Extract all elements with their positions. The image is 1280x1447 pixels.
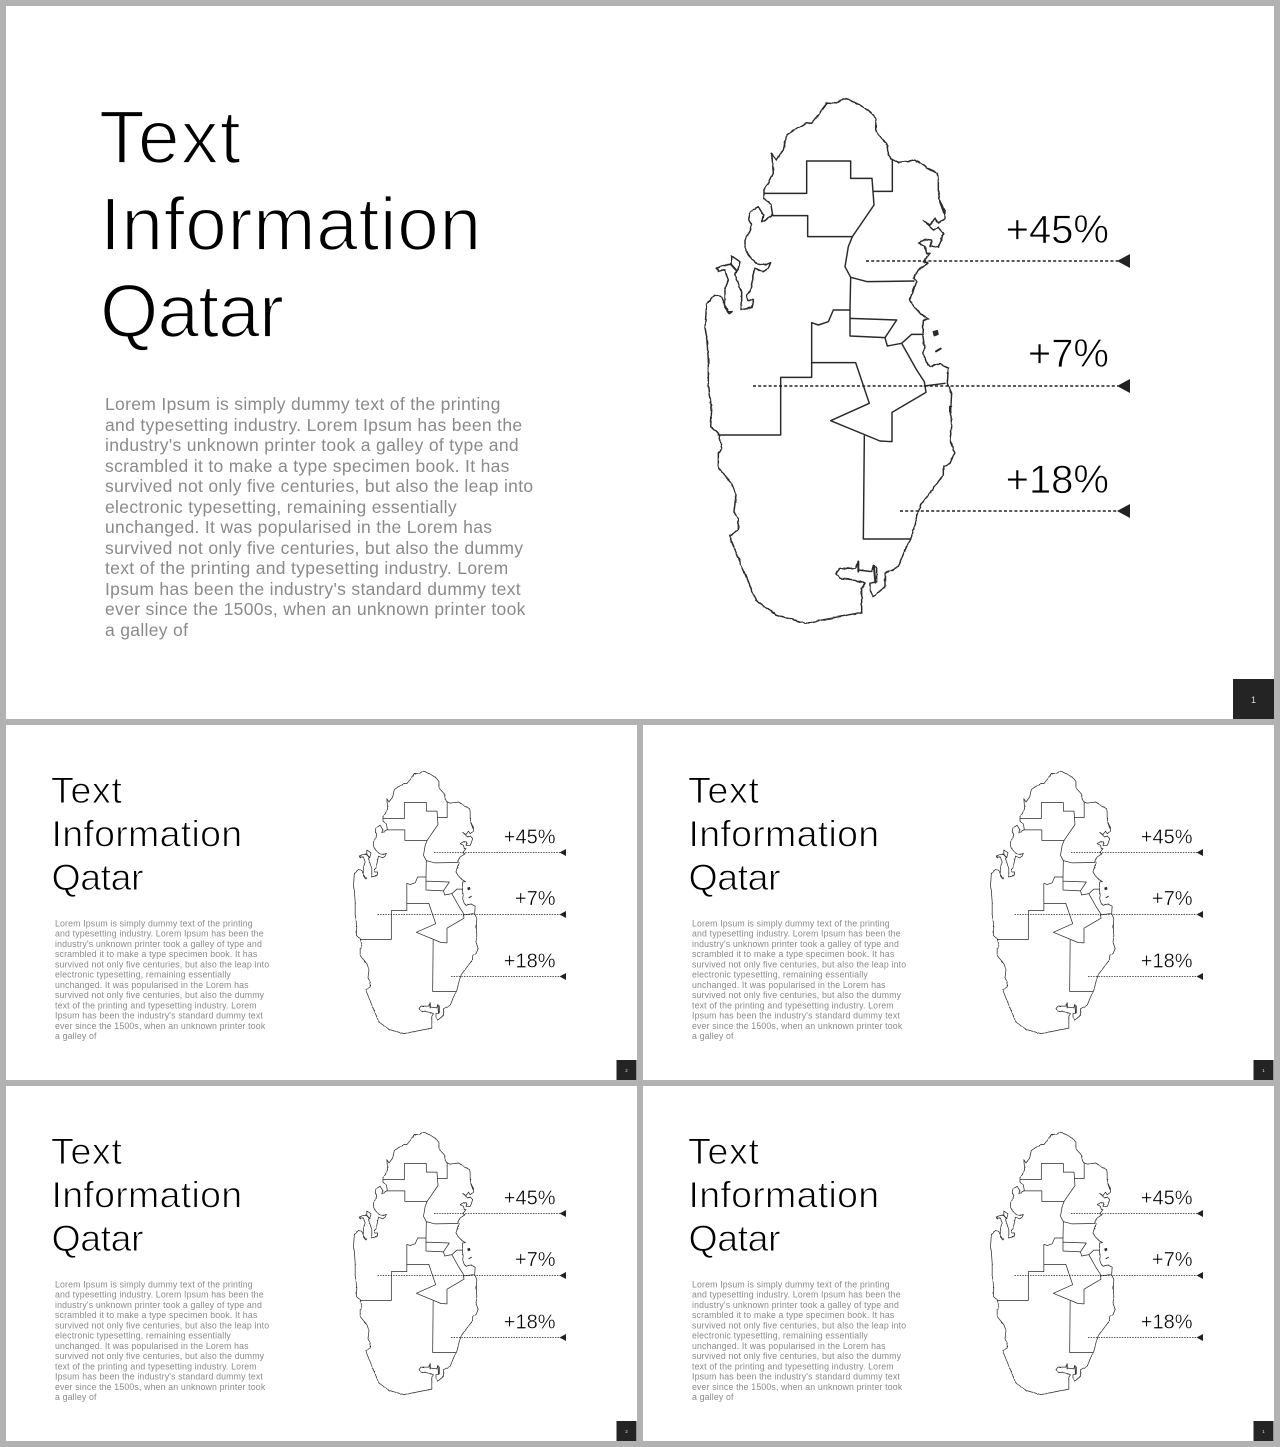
- body text: a galley of: [692, 1031, 734, 1041]
- leader arrow: +45%: [434, 849, 566, 856]
- leader arrow: +7%: [1014, 1272, 1203, 1279]
- panel: large slide 1 background: [6, 6, 1274, 719]
- body text: text of the printing and typesetting industry. Lorem: [692, 1000, 894, 1010]
- title: [688, 1130, 879, 1259]
- body text: text of the printing and typesetting industry. Lorem: [105, 558, 508, 578]
- label: +45%: +45%: [504, 1187, 556, 1209]
- body text: survived not only five centuries, but also the leap into: [105, 476, 533, 496]
- panel: small slide 3 background: [643, 725, 1274, 1080]
- body text: text of the printing and typesetting industry. Lorem: [692, 1361, 894, 1371]
- page number: 2: [625, 1429, 628, 1434]
- page number: [616, 1060, 636, 1080]
- body text: unchanged. It was popularised in the Lorem has: [55, 1341, 249, 1351]
- label: +18%: +18%: [504, 950, 556, 972]
- body text: and typesetting industry. Lorem Ipsum has been the: [55, 1290, 264, 1300]
- label: +18%: +18%: [504, 1311, 556, 1333]
- body text: Lorem Ipsum is simply dummy text of the printing: [55, 1280, 253, 1290]
- leader arrow: +45%: [866, 254, 1130, 268]
- title: [51, 769, 242, 898]
- title: Text: [688, 1130, 760, 1172]
- body text: ever since the 1500s, when an unknown printer took: [692, 1382, 902, 1392]
- body text: survived not only five centuries, but also the dummy: [692, 1351, 901, 1361]
- label: +7%: +7%: [1152, 1248, 1192, 1270]
- body text: [55, 1280, 269, 1402]
- title: Text: [99, 95, 242, 179]
- body text: [692, 1280, 906, 1402]
- leader arrow: +7%: [1014, 911, 1203, 918]
- body text: ever since the 1500s, when an unknown printer took: [55, 1382, 265, 1392]
- title: Qatar: [52, 856, 143, 898]
- label: +18%: +18%: [1006, 458, 1109, 502]
- label: +45%: +45%: [504, 826, 556, 848]
- label: +18%: +18%: [1141, 1311, 1192, 1333]
- map: Qatar regions: [704, 98, 956, 624]
- title: Text: [688, 769, 760, 811]
- body text: unchanged. It was popularised in the Lorem has: [105, 517, 492, 537]
- body text: survived not only five centuries, but also the dummy: [105, 538, 523, 558]
- body text: Lorem Ipsum is simply dummy text of the printing: [692, 918, 890, 928]
- body text: ever since the 1500s, when an unknown printer took: [55, 1021, 265, 1031]
- slide 2: [51, 769, 636, 1080]
- map: Qatar regions: [990, 770, 1116, 1034]
- body text: text of the printing and typesetting industry. Lorem: [55, 1361, 257, 1371]
- body text: and typesetting industry. Lorem Ipsum has been the: [105, 415, 522, 435]
- leader arrow: +7%: [378, 1272, 566, 1279]
- body text: Ipsum has been the industry's standard dummy text: [105, 579, 521, 599]
- body text: electronic typesetting, remaining essentially: [692, 970, 868, 980]
- body text: electronic typesetting, remaining essentially: [105, 497, 457, 517]
- body text: survived not only five centuries, but also the leap into: [55, 1320, 269, 1330]
- leader arrow: +18%: [1088, 1334, 1203, 1341]
- leader arrow: +7%: [378, 911, 566, 918]
- body text: unchanged. It was popularised in the Lorem has: [692, 1341, 886, 1351]
- body text: scrambled it to make a type specimen book. It has: [692, 1310, 894, 1320]
- page number: [1254, 1421, 1274, 1441]
- leader arrow: +45%: [1071, 1210, 1203, 1217]
- body text: unchanged. It was popularised in the Lorem has: [692, 980, 886, 990]
- leader arrow: +45%: [1071, 849, 1203, 856]
- page number: 1: [1262, 1429, 1265, 1434]
- body text: unchanged. It was popularised in the Lorem has: [55, 980, 249, 990]
- page number: [1233, 679, 1274, 719]
- body text: ever since the 1500s, when an unknown printer took: [105, 599, 526, 619]
- body text: scrambled it to make a type specimen book. It has: [105, 456, 510, 476]
- body text: survived not only five centuries, but also the leap into: [692, 1320, 906, 1330]
- leader arrow: +18%: [1088, 973, 1203, 980]
- map: Qatar regions: [353, 1132, 479, 1395]
- body text: text of the printing and typesetting industry. Lorem: [55, 1000, 257, 1010]
- title: Information: [688, 812, 879, 854]
- panel: small slide 5 background: [643, 1086, 1274, 1441]
- title: [688, 769, 879, 898]
- leader arrow: +18%: [451, 973, 566, 980]
- body text: ever since the 1500s, when an unknown printer took: [692, 1021, 902, 1031]
- title: Information: [52, 812, 242, 854]
- slide 4: [51, 1130, 636, 1441]
- body text: electronic typesetting, remaining essentially: [692, 1331, 868, 1341]
- label: +7%: +7%: [1152, 888, 1192, 910]
- body text: and typesetting industry. Lorem Ipsum has been the: [692, 929, 901, 939]
- panel: small slide 2 background: [6, 725, 637, 1080]
- body text: industry's unknown printer took a galley of type and: [55, 939, 262, 949]
- body text: a galley of: [55, 1392, 97, 1402]
- body text: survived not only five centuries, but also the dummy: [55, 990, 264, 1000]
- leader arrow: +45%: [434, 1210, 566, 1217]
- body text: Ipsum has been the industry's standard dummy text: [55, 1011, 263, 1021]
- label: +45%: +45%: [1141, 826, 1192, 848]
- title: Qatar: [688, 1217, 780, 1259]
- label: +18%: +18%: [1141, 950, 1192, 972]
- label: +45%: +45%: [1006, 208, 1109, 252]
- body text: a galley of: [55, 1031, 97, 1041]
- panel: small slide 4 background: [6, 1086, 637, 1441]
- label: +7%: +7%: [515, 1248, 556, 1270]
- body text: a galley of: [692, 1392, 734, 1402]
- page number: 1: [1251, 695, 1256, 705]
- title: Qatar: [688, 856, 780, 898]
- body text: Lorem Ipsum is simply dummy text of the printing: [105, 394, 501, 414]
- body text: and typesetting industry. Lorem Ipsum has been the: [692, 1290, 901, 1300]
- title: [99, 95, 482, 353]
- label: +7%: +7%: [515, 888, 556, 910]
- title: Information: [52, 1174, 242, 1216]
- body text: and typesetting industry. Lorem Ipsum has been the: [55, 929, 264, 939]
- page number: [1254, 1060, 1274, 1080]
- leader arrow: +7%: [753, 379, 1130, 393]
- label: +45%: +45%: [1141, 1187, 1192, 1209]
- body text: industry's unknown printer took a galley of type and: [692, 1300, 899, 1310]
- leader arrow: +18%: [451, 1334, 566, 1341]
- title: Information: [688, 1174, 879, 1216]
- body text: survived not only five centuries, but also the leap into: [692, 959, 906, 969]
- body text: [105, 394, 533, 640]
- body text: Ipsum has been the industry's standard dummy text: [692, 1372, 900, 1382]
- title: [51, 1130, 242, 1259]
- page number: 1: [1262, 1068, 1265, 1073]
- leader arrow: +18%: [900, 504, 1130, 518]
- map: Qatar regions: [353, 770, 479, 1034]
- title: Information: [100, 182, 482, 266]
- body text: [692, 918, 906, 1041]
- map: Qatar regions: [990, 1132, 1116, 1395]
- body text: survived not only five centuries, but also the leap into: [55, 959, 269, 969]
- body text: a galley of: [105, 620, 188, 640]
- body text: industry's unknown printer took a galley of type and: [55, 1300, 262, 1310]
- title: Text: [51, 769, 123, 811]
- body text: Ipsum has been the industry's standard dummy text: [55, 1372, 263, 1382]
- body text: scrambled it to make a type specimen book. It has: [55, 1310, 257, 1320]
- page number: 2: [625, 1068, 628, 1073]
- body text: [55, 918, 269, 1041]
- body text: Lorem Ipsum is simply dummy text of the printing: [55, 918, 253, 928]
- body text: Ipsum has been the industry's standard dummy text: [692, 1011, 900, 1021]
- body text: electronic typesetting, remaining essentially: [55, 1331, 231, 1341]
- label: +7%: +7%: [1028, 332, 1109, 376]
- body text: industry's unknown printer took a galley of type and: [105, 435, 519, 455]
- body text: Lorem Ipsum is simply dummy text of the printing: [692, 1280, 890, 1290]
- title: Text: [51, 1130, 123, 1172]
- page number: [616, 1421, 636, 1441]
- body text: electronic typesetting, remaining essentially: [55, 970, 231, 980]
- body text: survived not only five centuries, but also the dummy: [692, 990, 901, 1000]
- slide 5: [688, 1130, 1274, 1441]
- slide 3: [688, 769, 1274, 1080]
- body text: scrambled it to make a type specimen book. It has: [692, 949, 894, 959]
- title: Qatar: [100, 269, 283, 353]
- body text: survived not only five centuries, but also the dummy: [55, 1351, 264, 1361]
- title: Qatar: [52, 1217, 143, 1259]
- slide 1: [99, 95, 1274, 719]
- body text: scrambled it to make a type specimen book. It has: [55, 949, 257, 959]
- body text: industry's unknown printer took a galley of type and: [692, 939, 899, 949]
